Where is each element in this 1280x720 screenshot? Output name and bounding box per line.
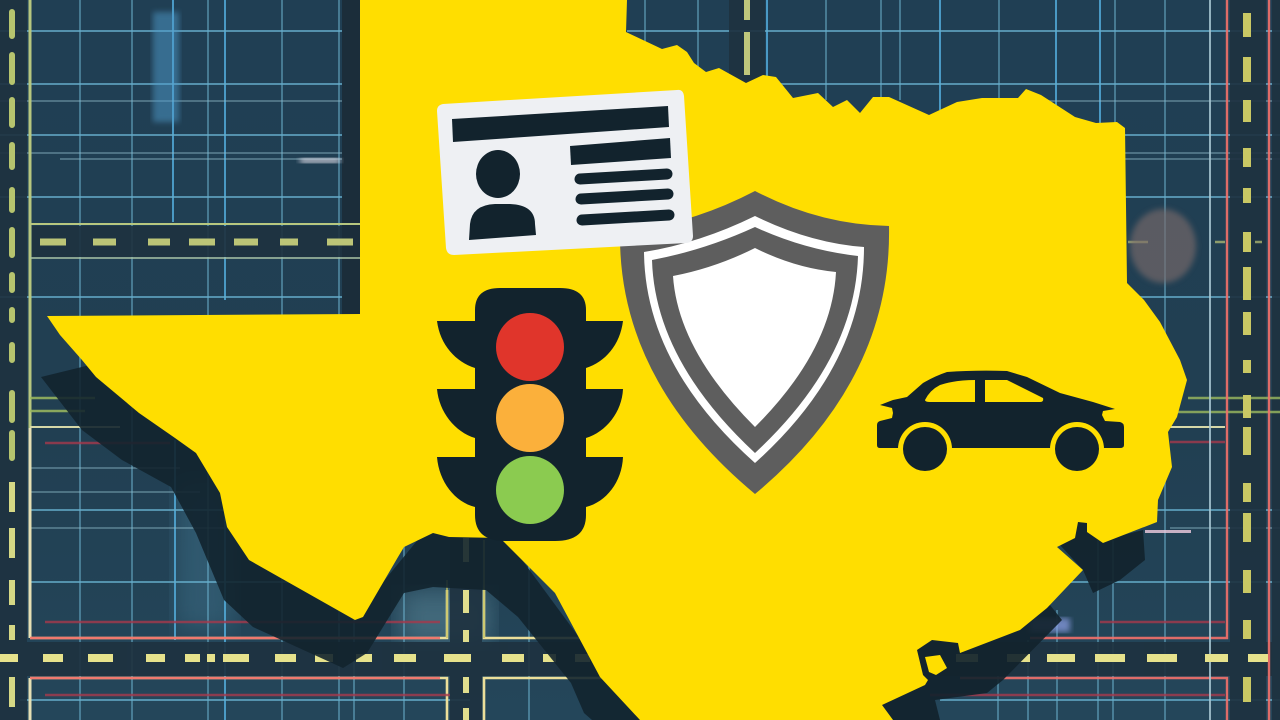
coastal shadow: bay [1060,520,1145,593]
centre road dashes [9,12,15,458]
green lamp [496,456,564,524]
Texas drop shadow [41,365,640,720]
road edge lines [28,0,32,428]
amber lamp [496,384,564,452]
icon: driver's license card [437,90,693,255]
icon: car [877,371,1124,476]
coastal shadow: lower coast [882,605,1062,720]
icon: shield [620,191,889,494]
red lamp [496,313,564,381]
card text lines [570,138,671,220]
glows and glints [153,12,179,122]
icon: traffic light [437,288,623,541]
card portrait [469,150,536,240]
island lagoon [925,655,947,675]
